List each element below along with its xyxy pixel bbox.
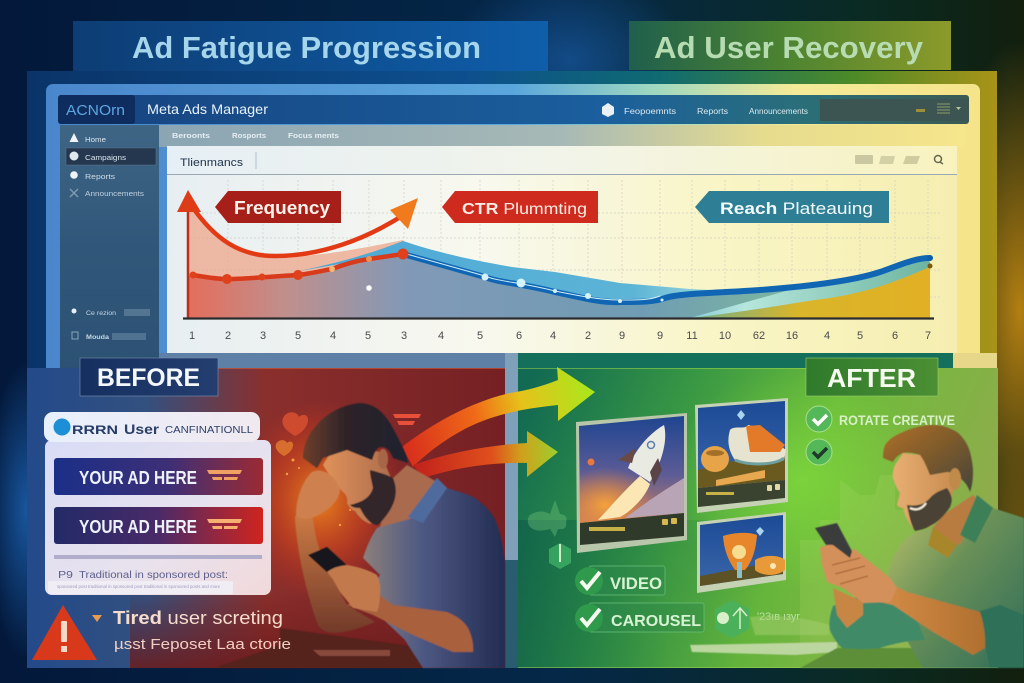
top navigation bar: ACNOrn (66, 102, 125, 119)
hair (303, 403, 408, 468)
arrow: frequency curve (191, 198, 418, 256)
chart area: fatigue (189, 205, 403, 318)
ad slot 2 (54, 507, 263, 544)
phone (815, 523, 855, 565)
heading: Ad User Recovery: Ad User Recovery (654, 30, 924, 65)
x axis labels: 5 (295, 330, 301, 342)
table and book (690, 642, 837, 655)
after badge: AFTER (827, 363, 916, 393)
x axis labels: 62 (753, 330, 765, 342)
chart area: gold recovery (690, 267, 930, 318)
top navigation bar (58, 95, 969, 124)
ad slot 1: YOUR AD HERE (79, 468, 197, 488)
ad slot 2: YOUR AD HERE (79, 517, 197, 537)
icon: warning triangle (32, 605, 97, 660)
figure: happy man with phone (690, 425, 1024, 668)
creative card: cup (697, 512, 786, 593)
strip behind panels (159, 353, 997, 668)
icon: hearts and sparks (276, 412, 421, 526)
x axis labels: 2 (225, 330, 231, 342)
sidebar navigation: Mouda (86, 334, 109, 341)
label: Reach Plateauing (695, 191, 889, 223)
x axis labels: 1 (189, 330, 195, 342)
checklist: carousel: CAROUSEL (611, 613, 701, 630)
collar (408, 478, 447, 523)
panel: after (518, 358, 1024, 668)
x axis labels: 9 (657, 330, 663, 342)
caption: tired user: µsst Feposet Laa ctorie (114, 637, 291, 653)
face (323, 446, 397, 524)
hair (883, 425, 973, 492)
label: Frequency (215, 191, 341, 223)
sidebar navigation: Home (85, 135, 106, 144)
x axis labels: 4 (550, 330, 556, 342)
performance header: Tlienmancs (180, 157, 244, 169)
lower arm (833, 588, 863, 628)
top navigation bar: Feopoemnts (624, 106, 676, 116)
x axis labels: 16 (786, 330, 798, 342)
sidebar navigation (60, 125, 159, 370)
x axis labels: 3 (260, 330, 266, 342)
top navigation bar: Meta Ads Manager (147, 101, 268, 117)
performance header (167, 146, 957, 175)
beard (907, 488, 952, 531)
x axis labels: 5 (365, 330, 371, 342)
label: Frequency: Frequency (234, 198, 330, 218)
icon: growth badge: '23ıв ıзуr (757, 611, 800, 623)
hands (820, 545, 897, 603)
icon: rocket (598, 425, 665, 520)
checklist: video: VIDEO (610, 574, 662, 593)
x axis labels: 9 (619, 330, 625, 342)
axes (187, 205, 189, 318)
CTR red line (190, 248, 408, 291)
torso (888, 495, 1024, 668)
sub navigation tabs (159, 125, 965, 147)
creative card: shoe carousel (695, 398, 788, 513)
table (215, 628, 425, 668)
sub navigation tabs: Beroonts (172, 131, 210, 140)
left sleeve (829, 598, 925, 649)
sidebar navigation: Ce rezion (86, 310, 116, 317)
sidebar navigation: Reports (85, 172, 115, 181)
feed header (44, 412, 260, 442)
x axis labels: 4 (824, 330, 830, 342)
feed header: CANFINATIONLL (165, 425, 253, 436)
ad slot 1 (54, 458, 263, 495)
chart area: blue band (270, 241, 930, 318)
sponsored feed card: sponsored post traditional in sponsored post traditional in sponsored posts and more (57, 584, 220, 589)
x axis labels: 5 (857, 330, 863, 342)
collars (960, 495, 993, 543)
sidebar navigation: Announcements (85, 189, 144, 198)
caption: tired user: Tired user screting (113, 608, 283, 628)
x axis labels: 4 (330, 330, 336, 342)
top navigation bar: Reports (697, 106, 728, 116)
heading: Ad User Recovery (629, 21, 951, 70)
feed header: RRRN (72, 423, 118, 437)
before badge: BEFORE (97, 364, 200, 392)
sponsored feed card (44, 412, 271, 595)
reach curve (403, 253, 930, 302)
arrow: small transition arrow (413, 431, 558, 478)
sponsored feed card: Traditional in sponsored post: (79, 569, 228, 581)
x axis labels: 10 (719, 330, 731, 342)
label: CTR Plummeting: CTR Plummting (462, 201, 587, 218)
beard (350, 470, 396, 525)
label: Reach Plateauing: Reach Plateauing (720, 199, 873, 218)
torso (363, 478, 505, 668)
icon: shoe (728, 425, 786, 464)
outer frame (27, 71, 997, 371)
raised arm (295, 516, 375, 633)
x axis labels (189, 330, 931, 342)
x axis labels: 4 (438, 330, 444, 342)
neck (933, 495, 980, 545)
x axis labels: 11 (686, 330, 698, 342)
hand on forehead (296, 471, 340, 519)
before badge (80, 358, 218, 396)
x axis labels: 5 (477, 330, 483, 342)
top navigation bar: Announcements (749, 106, 808, 116)
arrow: large transition arrow (402, 367, 595, 467)
rear sleeve (977, 605, 1024, 668)
panel: before (27, 358, 505, 668)
after badge (806, 358, 938, 396)
label: CTR Plummeting (442, 191, 598, 223)
x axis labels: 6 (516, 330, 522, 342)
checklist: rotate creative: ROTATE CREATIVE (839, 413, 955, 428)
x axis labels: 7 (925, 330, 931, 342)
phone (308, 547, 352, 580)
line chart (167, 175, 957, 353)
icon: growth badge (715, 600, 800, 638)
figure: tired man with phone (215, 403, 505, 668)
feed header: User (124, 421, 160, 437)
forearm (347, 592, 473, 652)
x axis labels: 6 (892, 330, 898, 342)
face (893, 453, 955, 529)
heading: Ad Fatigue Progression (73, 21, 548, 71)
heading: Ad Fatigue Progression: Ad Fatigue Progression (132, 30, 481, 65)
checklist: rotate creative (806, 406, 955, 465)
creative card: rocket video (576, 413, 687, 553)
checklist: video (575, 566, 665, 595)
icon: glowing cup (723, 533, 785, 578)
holding hand (327, 565, 380, 612)
sub navigation tabs: Focus ments (288, 131, 339, 140)
x axis labels: 2 (585, 330, 591, 342)
forearm (880, 585, 985, 655)
x axis labels: 3 (401, 330, 407, 342)
sidebar navigation: Campaigns (85, 153, 126, 162)
sponsored feed card: P9 (58, 570, 74, 581)
neck (380, 465, 437, 527)
caption: tired user (92, 608, 291, 653)
sub navigation tabs: Rosports (232, 131, 266, 140)
checklist: carousel (575, 603, 704, 632)
dashboard panel: Meta Ads Manager (46, 84, 980, 374)
decorative city silhouette (800, 475, 930, 650)
